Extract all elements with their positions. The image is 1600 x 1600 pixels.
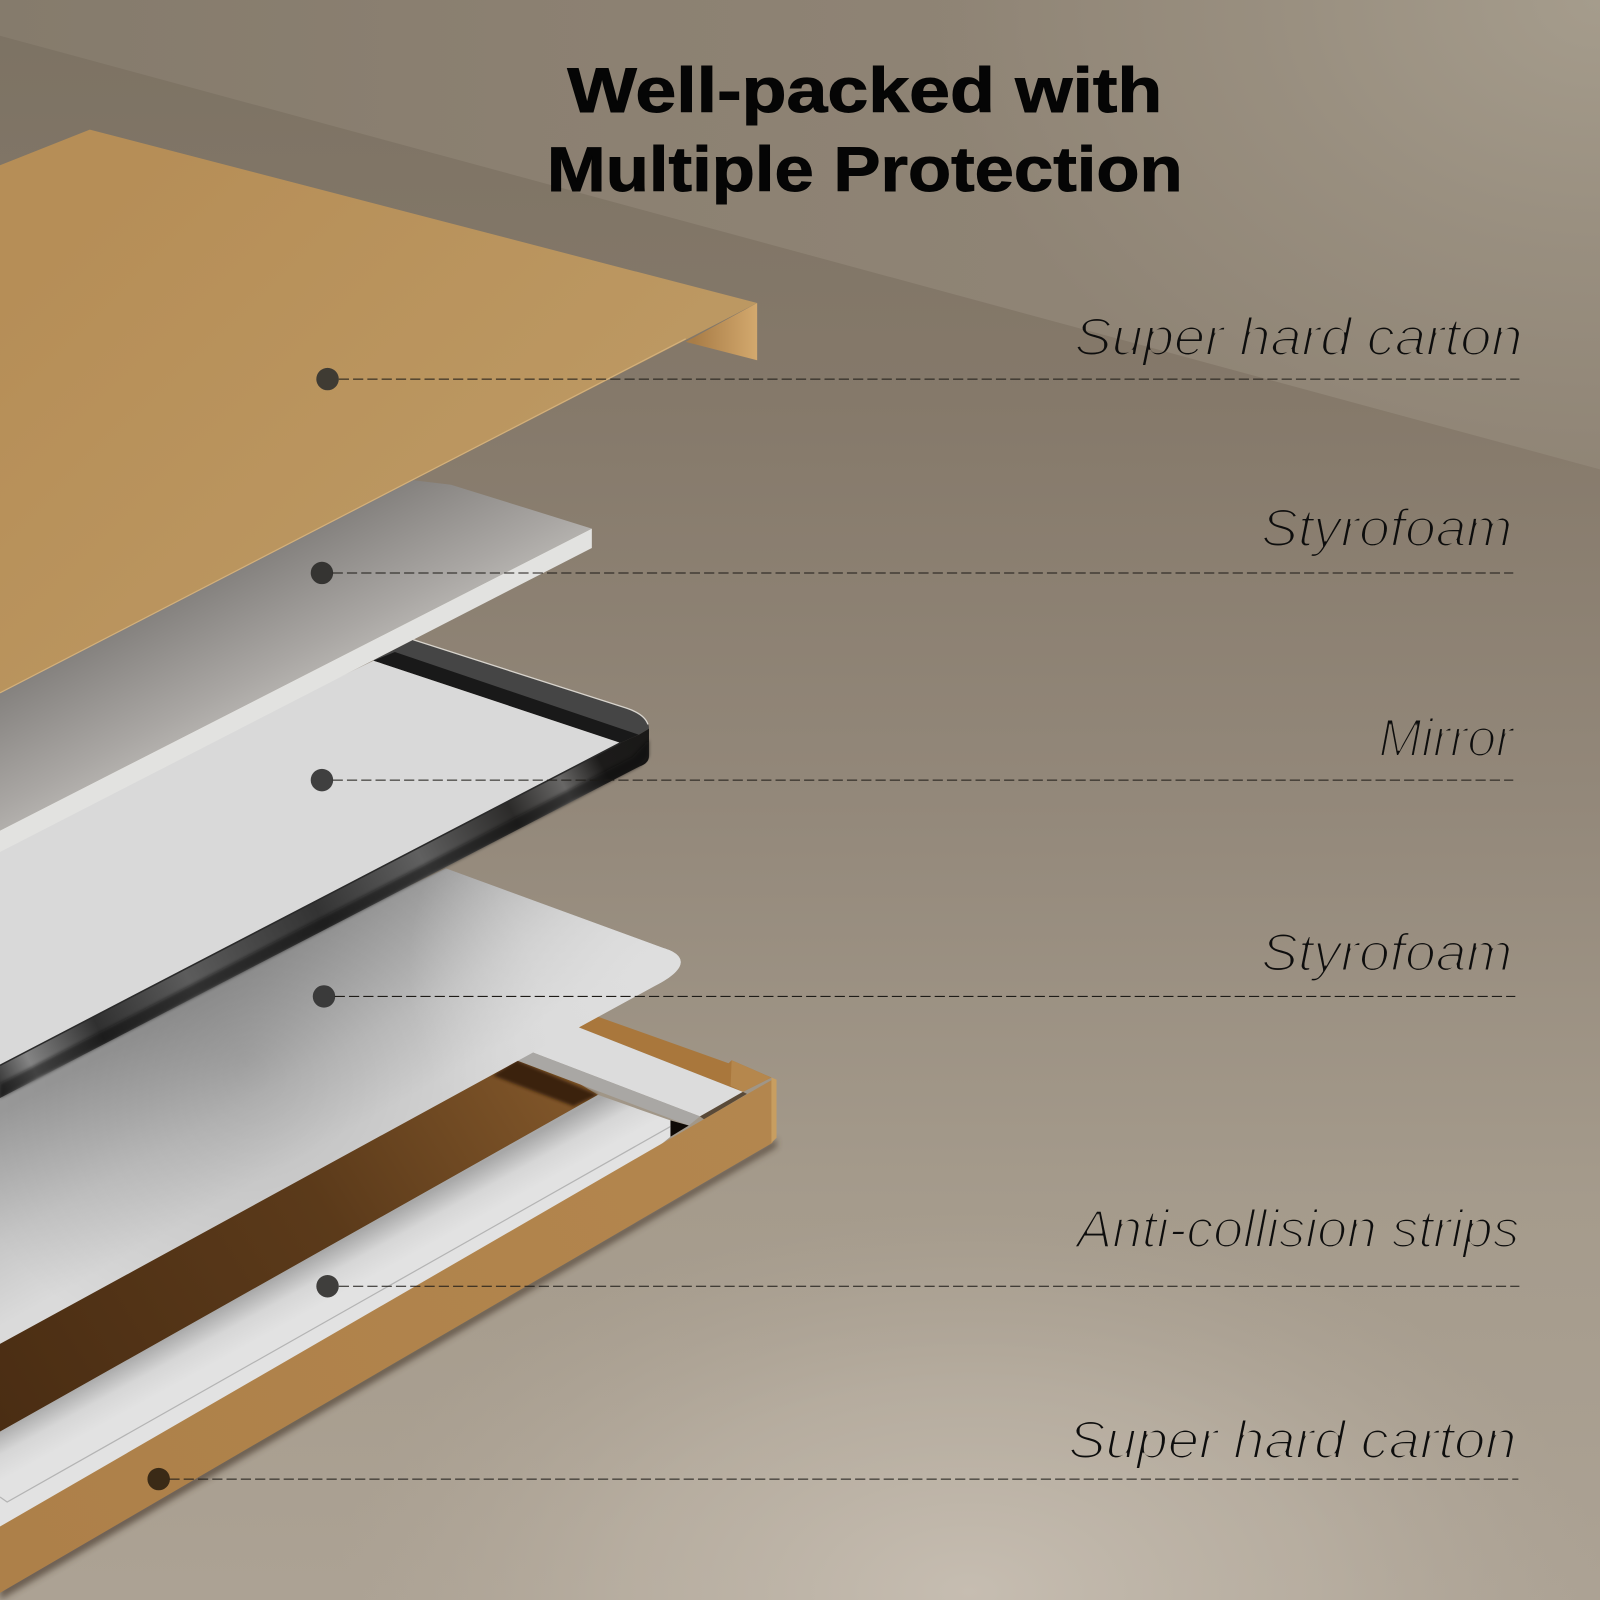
callout: super hard carton (bottom) (147, 1411, 1518, 1490)
side face (0, 529, 592, 852)
bottom carton tray (0, 1016, 777, 1600)
mirror frame highlight (413, 640, 648, 724)
callout: anti-collision strips: Anti-collision strips (1074, 1200, 1519, 1259)
carton flap (686, 303, 757, 360)
callout: anti-collision strips (316, 1200, 1519, 1297)
tray front face (0, 1080, 772, 1593)
back anti-collision strip (516, 1027, 747, 1137)
carton top face (0, 130, 757, 693)
tray end strip (771, 1078, 777, 1143)
callout: super hard carton (top): Super hard carton (1074, 308, 1522, 367)
mirror glass surface (0, 661, 620, 1065)
callout: super hard carton (top) (316, 308, 1522, 390)
panel: mirror (0, 640, 649, 1098)
shadow under tray (0, 1139, 777, 1600)
callout: styrofoam (upper) (311, 499, 1513, 584)
callout: mirror: Mirror (1379, 709, 1516, 768)
panel: upper styrofoam (0, 480, 592, 852)
callout: mirror (311, 709, 1516, 791)
brown interior of tray (0, 1046, 598, 1432)
carton edge highlight (0, 339, 686, 693)
tray back wall (577, 1016, 771, 1092)
callout: styrofoam (lower) (313, 923, 1515, 1008)
top face (0, 480, 592, 831)
dark inner shadow band (493, 1060, 598, 1106)
title (547, 56, 1183, 205)
mirror frame top band (373, 640, 649, 743)
callout: styrofoam (lower): Styrofoam (1261, 923, 1512, 982)
front anti-collision strip (0, 1095, 670, 1529)
mirror frame dark inner band (373, 652, 639, 743)
callout: super hard carton (bottom): Super hard carton (1068, 1411, 1516, 1470)
title: Multiple Protection (547, 135, 1183, 205)
callout: styrofoam (upper): Styrofoam (1261, 499, 1512, 558)
title: Well-packed with (567, 56, 1162, 126)
panel: lower styrofoam (0, 868, 681, 1344)
tray corner wall (731, 1060, 771, 1092)
panel: top carton (0, 130, 757, 693)
mirror frame front edge (0, 729, 649, 1098)
